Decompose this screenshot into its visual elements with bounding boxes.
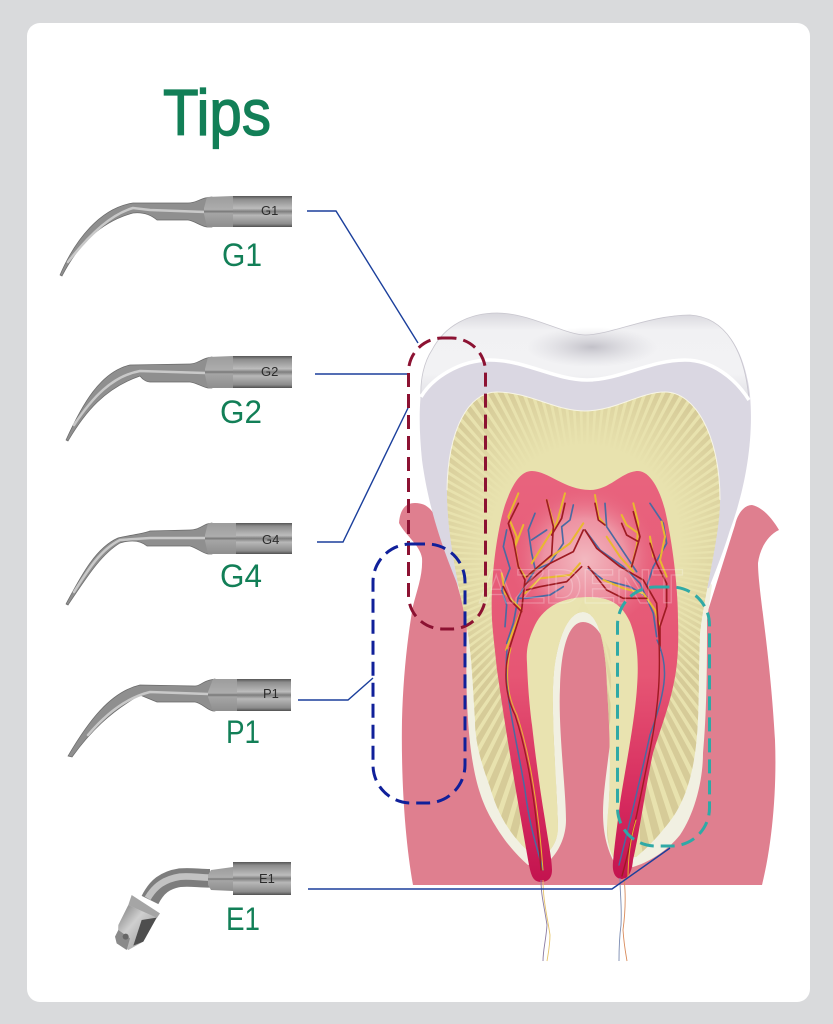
nerve ends below left root bbox=[541, 880, 550, 961]
enamel highlight band bbox=[421, 360, 749, 400]
enamel crown top bbox=[421, 313, 749, 400]
nerves and vessels, crown pulp bbox=[502, 493, 667, 650]
tip G1 bbox=[60, 196, 292, 276]
tip G4 bbox=[66, 523, 292, 605]
tip P1 bbox=[68, 679, 291, 757]
label G4: G4 bbox=[220, 558, 262, 594]
tip G2: G2 bbox=[261, 364, 278, 379]
connector E1 bbox=[308, 848, 670, 889]
dentin with tubule rays bbox=[447, 392, 720, 857]
pulp bbox=[485, 465, 685, 885]
right root nerves bbox=[619, 640, 665, 878]
nerve ends below right root bbox=[619, 878, 627, 961]
enamel crown side face bbox=[420, 313, 751, 600]
dashed zone: endodontic bbox=[618, 587, 710, 846]
connector G1 bbox=[307, 211, 418, 343]
dashed zone: periodontal bbox=[373, 544, 465, 803]
watermark: AZDENT bbox=[478, 561, 683, 614]
left root nerves bbox=[506, 648, 543, 870]
label E1: E1 bbox=[226, 901, 260, 937]
dentin outline bbox=[447, 392, 720, 500]
crown shadow in fissure bbox=[527, 327, 657, 367]
tip P1: P1 bbox=[263, 686, 279, 701]
connector G2 bbox=[315, 373, 408, 375]
label G1: G1 bbox=[222, 237, 262, 273]
tip E1 bbox=[115, 862, 291, 950]
tip E1: E1 bbox=[259, 871, 275, 886]
tooth diagram bbox=[399, 313, 779, 961]
tip G4: G4 bbox=[262, 532, 279, 547]
tip G2 bbox=[66, 356, 292, 441]
label G2: G2 bbox=[220, 394, 262, 430]
title: Tips bbox=[163, 76, 271, 149]
connector G4 bbox=[317, 408, 408, 542]
gum bbox=[399, 503, 779, 885]
label P1: P1 bbox=[226, 714, 260, 750]
connector P1 bbox=[298, 678, 373, 700]
root surface cementum bbox=[456, 450, 712, 867]
dashed zone: supragingival bbox=[408, 338, 486, 629]
tip G1: G1 bbox=[261, 203, 278, 218]
